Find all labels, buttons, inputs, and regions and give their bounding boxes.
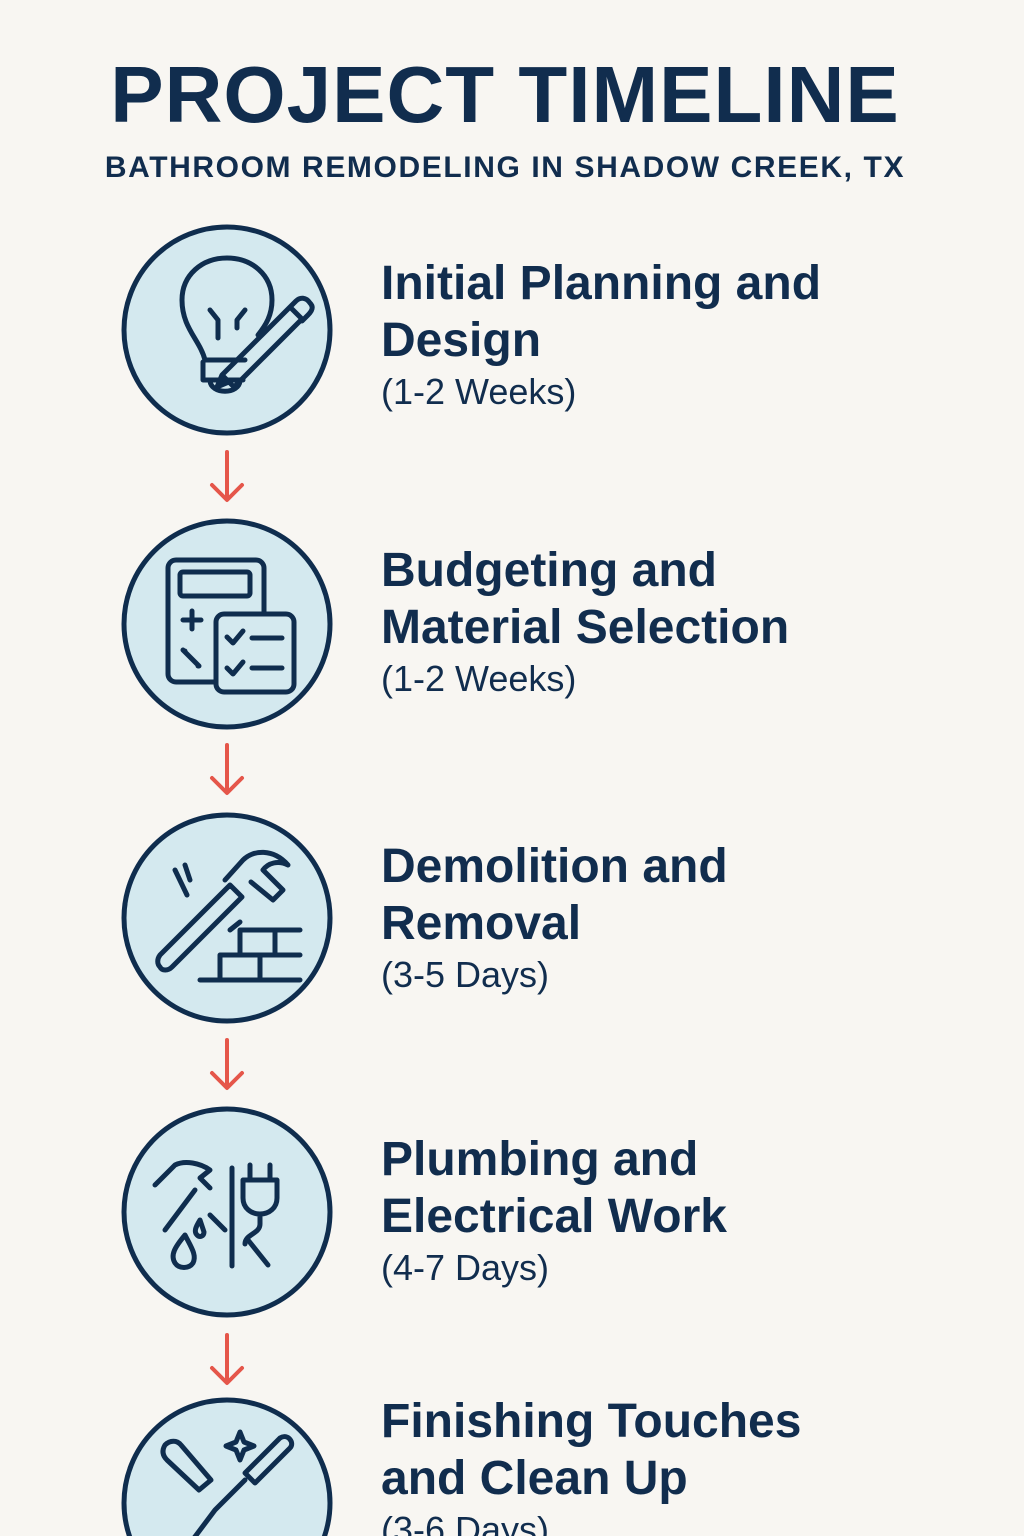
step 2 text: Material Selection: [381, 601, 789, 654]
step 1 text: Design: [381, 314, 541, 367]
subtitle: BATHROOM REMODELING IN SHADOW CREEK, TX: [105, 151, 905, 184]
arrow 3: [212, 1040, 242, 1088]
step 1 text: (1-2 Weeks): [381, 371, 576, 412]
step 5 text: [381, 1395, 801, 1536]
icon: finishing tools: [124, 1400, 330, 1536]
step 3 text: [381, 840, 728, 995]
step 2 text: (1-2 Weeks): [381, 658, 576, 699]
icon: plumbing and electrical: [124, 1109, 330, 1315]
arrow 2: [212, 745, 242, 793]
step 4 text: [381, 1133, 727, 1288]
step 2 text: [381, 544, 789, 699]
arrow 4: [212, 1335, 242, 1383]
step 5 text: and Clean Up: [381, 1452, 688, 1505]
step 3 text: (3-5 Days): [381, 954, 549, 995]
icon: hammer and bricks: [124, 815, 330, 1021]
step 2 text: Budgeting and: [381, 544, 717, 597]
title: PROJECT TIMELINE: [110, 50, 900, 139]
step 5 text: Finishing Touches: [381, 1395, 801, 1448]
icon: calculator and checklist: [124, 521, 330, 727]
icon: lightbulb and pencil: [124, 227, 330, 433]
step 1 text: Initial Planning and: [381, 257, 821, 310]
step 4 text: Electrical Work: [381, 1190, 727, 1243]
step 3 text: Demolition and: [381, 840, 728, 893]
step 4 text: (4-7 Days): [381, 1247, 549, 1288]
step 3 text: Removal: [381, 897, 581, 950]
step 1 text: [381, 257, 821, 412]
arrow 1: [212, 452, 242, 500]
step 4 text: Plumbing and: [381, 1133, 698, 1186]
